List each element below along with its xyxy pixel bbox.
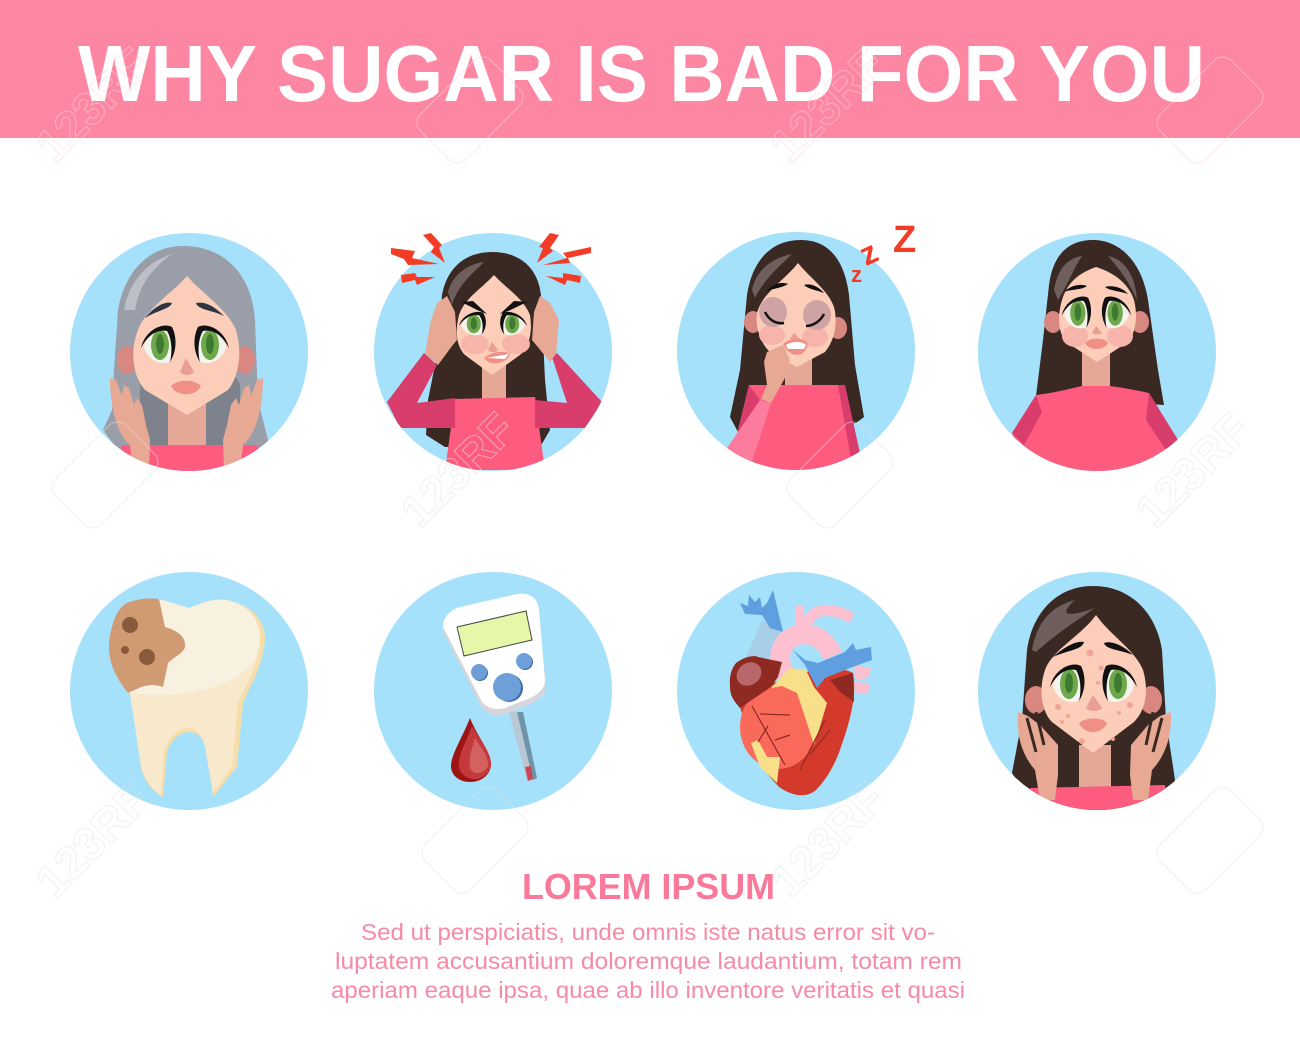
header band [0,0,1300,138]
stock watermarks: 123RF [390,403,525,537]
text block: lorem ipsum heading and paragraph [331,866,965,1003]
icon: pain lightning bolts [391,233,591,285]
panel: acne, woman with pimples [978,572,1216,815]
panel: fatigue, yawning woman [677,219,916,475]
icon: sleep letters: z [854,233,883,273]
icon: sleep letters [851,219,916,287]
body text: luptatem accusantium doloremque laudantium, totam rem [335,948,962,974]
body text: Sed ut perspiciatis, unde omnis iste natus error sit vo- [361,919,935,945]
stock watermarks: 123RF [1125,403,1260,537]
panel: headache, angry woman [374,233,612,471]
heading: LOREM IPSUM [522,866,775,907]
body text [331,919,965,1003]
icon: blood drop [451,718,491,782]
stock watermarks: 123RF [760,38,895,172]
stock watermarks: 123RF [25,773,160,907]
stock watermarks [25,38,1268,907]
icon: sleep letters: z [851,262,862,287]
panel: tooth decay [70,572,308,810]
panel: diabetes, glucose meter [374,572,612,810]
panel: puffy skin, sad woman [978,233,1216,480]
icon: anatomical heart [730,590,872,795]
body text: aperiam eaque ipsa, quae ab illo inventore veritatis et quasi [331,977,965,1003]
icon: sleep letters: Z [893,219,916,261]
panel: premature ageing, grey-haired woman [70,233,308,475]
stock watermarks: 123RF [25,38,160,172]
panel: heart disease [677,572,915,810]
icon: glucose meter [443,594,546,781]
title: WHY SUGAR IS BAD FOR YOU [78,29,1205,118]
acne spots [1055,650,1133,744]
icon: decayed tooth [109,598,265,797]
stock watermarks: 123RF [760,773,895,907]
